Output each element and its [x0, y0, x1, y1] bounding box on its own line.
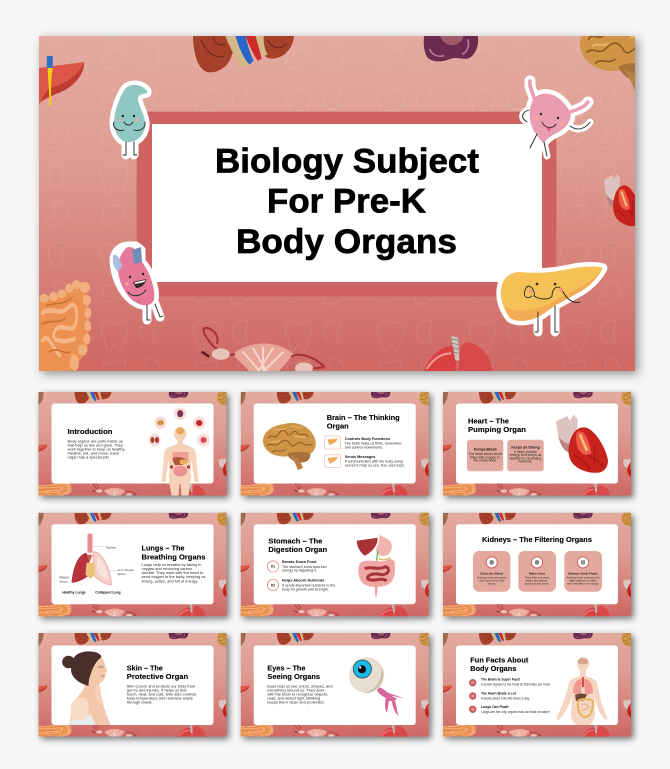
- card: keeps us strong: energy and keeps us: [510, 453, 542, 457]
- digestive system illustration: [357, 534, 395, 597]
- heading: Protective Organ: [127, 672, 188, 681]
- card: clean the blood: blood.: [488, 582, 496, 586]
- lungs labels: Pleural: [60, 576, 69, 580]
- lungs labels: [60, 545, 134, 594]
- icon: uterus: [202, 328, 324, 374]
- sticker: yellow liver character: [501, 266, 603, 332]
- heading: [468, 416, 526, 434]
- card: clean the blood: [473, 551, 510, 592]
- card: keeps us strong: Keeps Us Strong: [511, 446, 540, 450]
- heading: [142, 544, 206, 561]
- card: balance body fluids: and minerals in the body.: [567, 582, 599, 586]
- card: keeps us strong: nutrients.: [519, 460, 533, 464]
- card: balance body fluids: Balance Body Fluids: [568, 571, 598, 575]
- heading: [470, 655, 529, 673]
- body figure: [162, 427, 198, 496]
- body text: with the brain to recognize objects,: [267, 692, 328, 696]
- card: pumps blood: the entire body.: [474, 459, 497, 463]
- card: keeps us strong: It helps provide: [514, 450, 537, 454]
- item 01: energy by digesting it.: [282, 569, 317, 573]
- panel: fun facts slide: [439, 630, 641, 738]
- body text: Skin covers and protects our body from: [127, 683, 196, 688]
- card: make urine: water and waste,: [526, 579, 548, 583]
- item: controls body functions: The brain helps us think, remember,: [345, 441, 402, 445]
- card: make urine: [518, 551, 556, 592]
- card: balance body fluids: right balance of water: [569, 579, 597, 583]
- card: make urine: They filter out extra: [525, 576, 550, 580]
- body text: [142, 562, 205, 583]
- lungs labels: Collapsed Lung: [95, 590, 121, 594]
- body text: organ has a special job!: [68, 454, 109, 460]
- heart illustration: [556, 415, 608, 473]
- icon: heart: [604, 174, 642, 226]
- heading: Breathing Organs: [142, 552, 206, 561]
- eyeball illustration: [349, 657, 405, 716]
- panel: lungs slide: [34, 509, 236, 618]
- lungs labels: Trachea: [105, 545, 116, 549]
- body text: work together to keep us healthy,: [68, 446, 125, 452]
- body text: Eyes help us see colors, shapes, and: [267, 683, 333, 688]
- slide background: [39, 36, 635, 371]
- heading: Stomach – The: [268, 536, 322, 545]
- card: clean the blood: and toxins from the: [479, 579, 504, 583]
- card: balance body fluids: [564, 551, 602, 592]
- fact 1: [469, 678, 550, 687]
- heading: Seeing Organs: [267, 672, 320, 681]
- fact 2: [469, 691, 530, 700]
- item 02: [267, 579, 335, 591]
- item: controls body functions: [325, 436, 402, 449]
- white card: [254, 524, 416, 604]
- title frame: [137, 112, 556, 296]
- sticker: teal gallbladder character: [114, 85, 147, 155]
- body text: Lungs help us breathe by taking in: [142, 562, 201, 567]
- white card: [456, 404, 618, 484]
- panel: brain slide: [237, 389, 439, 497]
- woman illustration: [62, 651, 110, 725]
- white card: [456, 524, 618, 604]
- panel: stomach slide: [237, 509, 439, 618]
- panel: title slide: [39, 14, 665, 374]
- fact 2: It beats about 100,000 times a day.: [481, 696, 530, 700]
- icon: kidneys: [193, 36, 294, 72]
- lungs illustration: [60, 534, 116, 585]
- item 02: body for growth and strength.: [282, 587, 329, 591]
- heading: [268, 536, 327, 554]
- item 02: 02: [271, 583, 275, 587]
- card: pumps blood: The heart sends blood: [468, 452, 502, 456]
- heading: Body Organs: [470, 664, 516, 673]
- card: clean the blood: Kidneys remove waste: [477, 576, 507, 580]
- body text: dioxide. They work with the heart to: [142, 570, 204, 575]
- title: Biology Subject: [215, 142, 480, 180]
- fact 3: 03: [471, 707, 475, 711]
- item: controls body functions: and control movements.: [345, 445, 383, 449]
- body text: [267, 683, 333, 704]
- white card: [52, 646, 214, 725]
- body text: that help us live and grow. They: [68, 442, 123, 448]
- card: pumps blood: filled with oxygen to: [470, 455, 500, 459]
- fact 1: The Brain Is Super Fast!: [481, 678, 520, 682]
- icon: purple organ: [424, 36, 478, 62]
- heading: Eyes – The: [267, 663, 305, 672]
- body text: oxygen and removing carbon: [142, 566, 192, 571]
- lungs labels: Space: [60, 579, 68, 583]
- fact 2: 02: [471, 694, 475, 698]
- icon: intestines: [39, 280, 92, 372]
- body text: read, and detect light. Blinking: [267, 696, 320, 700]
- sticker: pink bladder character: [523, 81, 590, 156]
- panel: kidneys slide: [439, 509, 641, 618]
- body text: keeps them clean and protected.: [267, 700, 325, 704]
- icon: liver: [39, 56, 84, 106]
- heading: Introduction: [68, 427, 113, 436]
- card: keeps us strong: healthy by circulating: [510, 456, 541, 460]
- title: Body Organs: [236, 223, 457, 261]
- heading: Lungs – The: [142, 544, 184, 553]
- item: sends messages: nerves to help us see, feel, and react.: [345, 464, 405, 468]
- body text: send oxygen to the body, keeping us: [142, 574, 205, 579]
- fact 3: [469, 705, 550, 714]
- body text: breathe, eat, and move. Each: [68, 450, 119, 456]
- fact 3: Lungs Can Float!: [481, 705, 509, 709]
- body text: everything around us. They work: [267, 687, 324, 692]
- lungs labels: air in Pleural: [118, 568, 134, 572]
- panel: eyes slide: [237, 630, 439, 738]
- heading: Brain – The Thinking: [327, 413, 400, 422]
- heading: Organ: [327, 422, 349, 431]
- brain illustration: [263, 423, 316, 470]
- fact 1: 01: [471, 681, 475, 685]
- title: [215, 142, 480, 261]
- body text: germs and injuries. It helps us feel: [127, 687, 187, 692]
- white card: [456, 646, 618, 725]
- item 01: [267, 560, 327, 573]
- heading: Pumping Organ: [468, 425, 526, 434]
- panel: heart slide: [439, 389, 641, 497]
- item 01: Breaks Down Food: [282, 560, 317, 564]
- fact 2: The Heart Beats a Lot: [481, 691, 517, 695]
- card: balance body fluids: Kidneys help maintain the: [566, 576, 600, 580]
- title card: [152, 124, 542, 282]
- white card: [254, 646, 416, 725]
- item 02: Helps Absorb Nutrients: [282, 579, 324, 583]
- heading: Skin – The: [127, 663, 163, 672]
- panel: skin slide: [34, 630, 236, 738]
- body organs figure: [556, 657, 608, 725]
- sticker: pink heart character: [113, 246, 163, 320]
- lungs labels: Space: [118, 572, 126, 576]
- heading: Fun Facts About: [470, 655, 529, 664]
- heading: [327, 413, 400, 431]
- card: keeps us strong: [507, 440, 544, 471]
- body text: through sweat.: [127, 700, 153, 704]
- heading: [267, 663, 320, 681]
- body text: body temperature and removes waste: [127, 696, 194, 700]
- heading: Heart – The: [468, 416, 509, 425]
- card: pumps blood: Pumps Blood: [474, 448, 496, 452]
- card: pumps blood: [467, 440, 503, 471]
- white card: [52, 404, 214, 484]
- fact 3: Lungs are the only organs that can float on water!: [481, 710, 550, 714]
- item: sends messages: [325, 455, 405, 468]
- panel: introduction slide: [34, 389, 236, 497]
- body text: touch, heat, and cold. Skin also controls: [127, 692, 196, 696]
- card: make urine: turning it into urine.: [525, 582, 549, 586]
- icon: brain: [580, 14, 665, 94]
- heading: Kidneys – The Filtering Organs: [482, 535, 592, 544]
- lungs labels: Healthy Lungs: [62, 590, 86, 594]
- body text: strong, active, and full of energy.: [142, 578, 198, 583]
- organ icon circles: [148, 408, 210, 446]
- title: For Pre-K: [267, 182, 426, 220]
- item: sends messages: Sends Messages: [345, 455, 375, 459]
- body text: [68, 438, 125, 460]
- item 01: 01: [271, 565, 275, 569]
- heading: Digestion Organ: [268, 545, 327, 554]
- heading: [127, 663, 188, 681]
- fact 1: It sends signals to the body at 268 miles per hour!: [481, 683, 550, 687]
- icon: lungs: [424, 336, 492, 372]
- item 01: The stomach turns food into: [282, 565, 327, 569]
- white card: [52, 524, 214, 604]
- item: sends messages: It communicates with the body using: [345, 460, 403, 464]
- white card: [254, 404, 416, 484]
- item 02: It sends important nutrients to the: [282, 583, 335, 587]
- card: make urine: Make Urine: [529, 571, 545, 575]
- body text: Body organs are parts inside us: [68, 438, 123, 444]
- item: controls body functions: Controls Body Functions: [345, 437, 390, 441]
- body text: [127, 683, 196, 704]
- card: clean the blood: Clean the Blood: [480, 571, 503, 575]
